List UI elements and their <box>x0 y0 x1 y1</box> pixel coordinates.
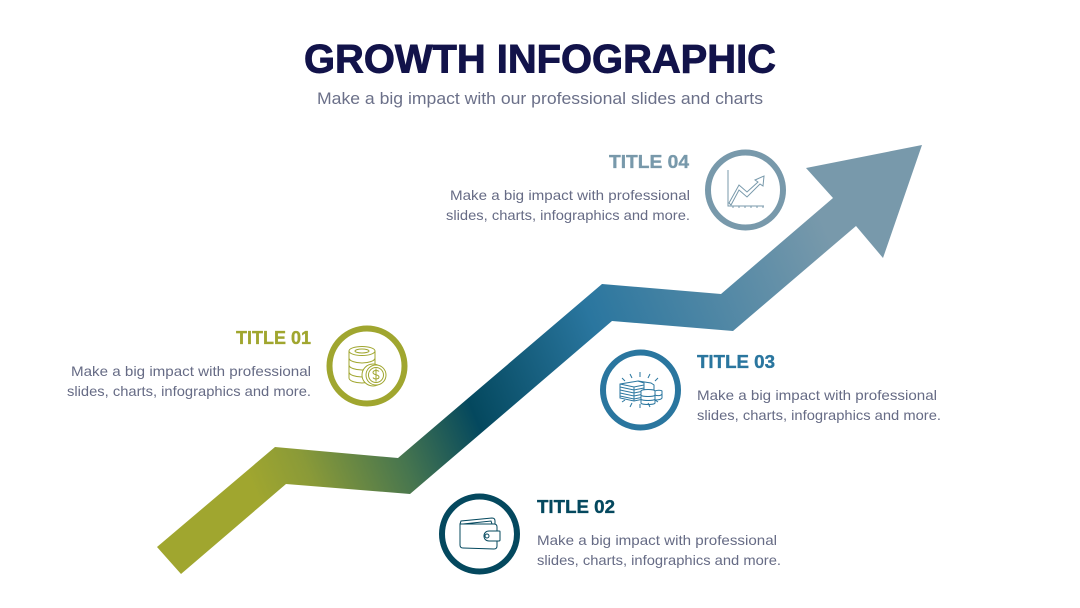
icon: wallet in dark teal ring <box>442 496 517 572</box>
text block: title 03 <box>697 387 941 423</box>
heading: title 03: TITLE 03 <box>697 352 775 372</box>
icon: coins in olive ring <box>330 328 404 404</box>
text block: title 01: Make a big impact with professional <box>71 363 311 379</box>
text block: title 02: Make a big impact with professional <box>537 532 777 548</box>
title: GROWTH INFOGRAPHIC <box>304 38 776 82</box>
growth arrow <box>157 145 922 574</box>
heading: title 01: TITLE 01 <box>236 328 311 348</box>
panel: title 04 <box>446 152 783 228</box>
icon: money stacks in blue ring <box>603 352 678 428</box>
panel: title 03 <box>603 352 941 428</box>
text block: title 02: slides, charts, infographics and more. <box>537 552 781 568</box>
text block: title 04: slides, charts, infographics and more. <box>446 207 690 223</box>
heading: title 02: TITLE 02 <box>537 497 615 517</box>
icon: growth chart in grey-blue ring <box>708 152 783 228</box>
subtitle: Make a big impact with our professional slides and charts <box>317 89 763 108</box>
text block: title 01: slides, charts, infographics and more. <box>67 383 311 399</box>
panel: title 01 <box>67 328 404 404</box>
text block: title 03: Make a big impact with professional <box>697 387 937 403</box>
text block: title 02 <box>537 532 781 568</box>
text block: title 03: slides, charts, infographics and more. <box>697 407 941 423</box>
text block: title 01 <box>67 363 311 399</box>
text block: title 04: Make a big impact with professional <box>450 187 690 203</box>
heading: title 04: TITLE 04 <box>609 152 689 172</box>
panel: title 02 <box>442 496 781 572</box>
text block: title 04 <box>446 187 690 223</box>
